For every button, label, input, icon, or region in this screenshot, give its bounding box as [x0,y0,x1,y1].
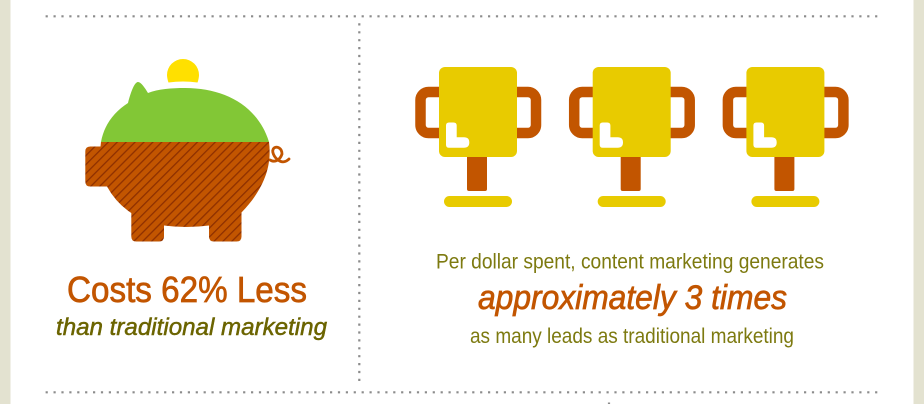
right background strip [914,0,924,404]
icon: three trophies [420,67,843,207]
icon: piggy bank with coin [85,59,289,242]
panel: cost savings [56,59,327,341]
text: per dollar spent: Per dollar spent, content marketing generates [436,250,824,274]
icon: piggy hatched lower part [85,142,270,242]
icon: coin [167,59,199,82]
icon: trophy 3 [728,67,843,207]
callout: approximately 3 times: approximately 3 times [478,279,787,317]
heading: costs 62% less: Costs 62% Less [67,269,307,310]
text: as many leads: as many leads as traditional marketing [470,324,794,348]
panel: leads generated [420,67,843,348]
left background strip [0,0,10,404]
icon: curly tail [270,147,289,162]
icon: piggy upper part [101,82,269,142]
icon: trophy 2 [574,67,690,207]
subheading: than traditional marketing: than traditional marketing [56,314,327,341]
icon: trophy 1 [420,67,536,207]
